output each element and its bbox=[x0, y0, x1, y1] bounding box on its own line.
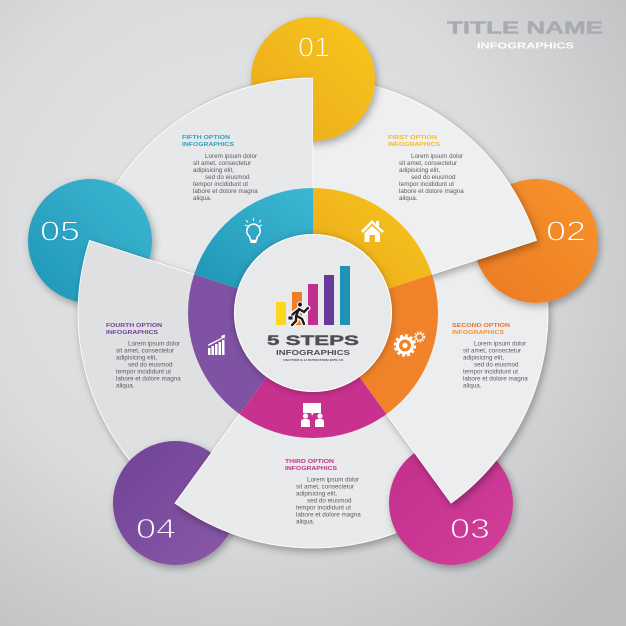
text block: first option: aliqua. bbox=[399, 195, 418, 202]
circle: step 03 bbox=[389, 441, 513, 565]
text block: second option: SECOND OPTION bbox=[452, 323, 510, 329]
text block: fourth option: FOURTH OPTION bbox=[106, 323, 162, 329]
icon: running businessman bbox=[288, 302, 308, 325]
circle: step 04 bbox=[113, 441, 237, 565]
text block: second option: sit amet, consectetur bbox=[463, 348, 521, 354]
text block: third option: tempor incididunt ut bbox=[296, 504, 351, 512]
number 05: 05 bbox=[40, 216, 80, 247]
number 01: 01 bbox=[298, 32, 330, 62]
segment: blue bbox=[194, 188, 313, 289]
text block: fourth option bbox=[106, 323, 181, 390]
text block: third option: adipisicing elit, bbox=[296, 490, 337, 498]
text block: second option: sed do eiusmod bbox=[474, 362, 519, 368]
panel: second option sheet bbox=[313, 240, 548, 503]
text block: second option: labore et dolore magna bbox=[463, 376, 528, 382]
panel: fifth option sheet tip over circle 01 bbox=[200, 76, 313, 188]
text block: third option: sed do eiusmod bbox=[307, 498, 352, 504]
panel: fourth option sheet bbox=[78, 240, 313, 503]
circle: step 05 bbox=[28, 179, 152, 303]
text block: first option: sed do eiusmod bbox=[411, 174, 456, 181]
text block: third option: THIRD OPTION bbox=[285, 459, 334, 465]
centre disc bbox=[234, 234, 392, 392]
text block: first option: labore et dolore magna bbox=[399, 188, 464, 195]
text block: third option: aliqua. bbox=[296, 518, 315, 526]
text block: fourth option: tempor incididunt ut bbox=[116, 368, 171, 376]
text block: fourth option: Lorem ipsum dolor bbox=[128, 340, 180, 348]
text block: first option: sit amet, consectetur bbox=[399, 160, 457, 167]
text block: first option: tempor incididunt ut bbox=[399, 181, 454, 188]
text block: fifth option: aliqua. bbox=[193, 195, 212, 202]
ring: five coloured segments bbox=[188, 188, 438, 438]
icon: light bulb bbox=[245, 218, 262, 242]
icon: gears bbox=[395, 332, 424, 356]
number 04: 04 bbox=[136, 513, 176, 544]
segment: yellow bbox=[313, 188, 432, 289]
text block: fifth option: labore et dolore magna bbox=[193, 188, 258, 195]
text block: fourth option: sit amet, consectetur bbox=[116, 348, 174, 354]
text block: fifth option: sit amet, consectetur bbox=[193, 160, 251, 167]
icon: people with speech bubble bbox=[301, 403, 324, 427]
centre heading: 5 STEPS bbox=[267, 332, 359, 348]
text block: fifth option bbox=[182, 135, 258, 202]
text block: third option: labore et dolore magna bbox=[296, 512, 361, 518]
text block: fifth option: adipisicing elit, bbox=[193, 167, 234, 174]
text block: first option bbox=[388, 135, 464, 202]
text block: fourth option: sed do eiusmod bbox=[128, 362, 173, 368]
text block: fifth option: INFOGRAPHICS bbox=[182, 142, 234, 148]
text block: fourth option: aliqua. bbox=[116, 382, 135, 390]
centre subheading: INFOGRAPHICS bbox=[276, 350, 350, 357]
text block: first option: adipisicing elit, bbox=[399, 167, 440, 174]
subtitle: INFOGRAPHICS bbox=[477, 40, 575, 50]
text block: fourth option: INFOGRAPHICS bbox=[106, 330, 158, 336]
text block: first option: INFOGRAPHICS bbox=[388, 142, 440, 148]
text block: second option bbox=[452, 323, 528, 390]
text block: third option: sit amet, consectetur bbox=[296, 484, 354, 490]
number 03: 03 bbox=[450, 513, 490, 544]
text block: fifth option: tempor incididunt ut bbox=[193, 181, 248, 188]
number 02: 02 bbox=[546, 216, 586, 247]
text block: third option bbox=[285, 459, 361, 526]
segment: purple bbox=[188, 274, 267, 414]
text block: first option: FIRST OPTION bbox=[388, 135, 437, 141]
text block: fifth option: sed do eiusmod bbox=[205, 174, 250, 181]
segment: magenta bbox=[240, 377, 386, 438]
icon: house bbox=[361, 220, 384, 242]
circle: step 01 bbox=[251, 17, 375, 141]
panel: first option sheet bbox=[313, 78, 536, 313]
text block: second option: adipisicing elit, bbox=[463, 354, 504, 362]
bar chart bbox=[276, 266, 350, 325]
icon: growth chart bbox=[208, 334, 225, 355]
text block: second option: tempor incididunt ut bbox=[463, 368, 518, 376]
centre caption: VECTOR ILLUSTRATION EPS 10 bbox=[283, 358, 343, 362]
text block: second option: Lorem ipsum dolor bbox=[474, 340, 526, 348]
text block: third option: Lorem ipsum dolor bbox=[307, 476, 359, 484]
panel: fifth option sheet bbox=[90, 78, 313, 313]
text block: fifth option: Lorem ipsum dolor bbox=[205, 153, 257, 160]
panel: third option sheet bbox=[175, 313, 451, 548]
title: TITLE NAME bbox=[447, 18, 603, 38]
text block: fourth option: adipisicing elit, bbox=[116, 354, 157, 362]
text block: third option: INFOGRAPHICS bbox=[285, 466, 337, 472]
text block: fifth option: FIFTH OPTION bbox=[182, 135, 230, 141]
text block: second option: aliqua. bbox=[463, 382, 482, 390]
text block: fourth option: labore et dolore magna bbox=[116, 376, 181, 382]
segment: orange bbox=[359, 274, 438, 414]
circle: step 02 bbox=[474, 179, 598, 303]
text block: second option: INFOGRAPHICS bbox=[452, 330, 504, 336]
text block: first option: Lorem ipsum dolor bbox=[411, 153, 463, 160]
